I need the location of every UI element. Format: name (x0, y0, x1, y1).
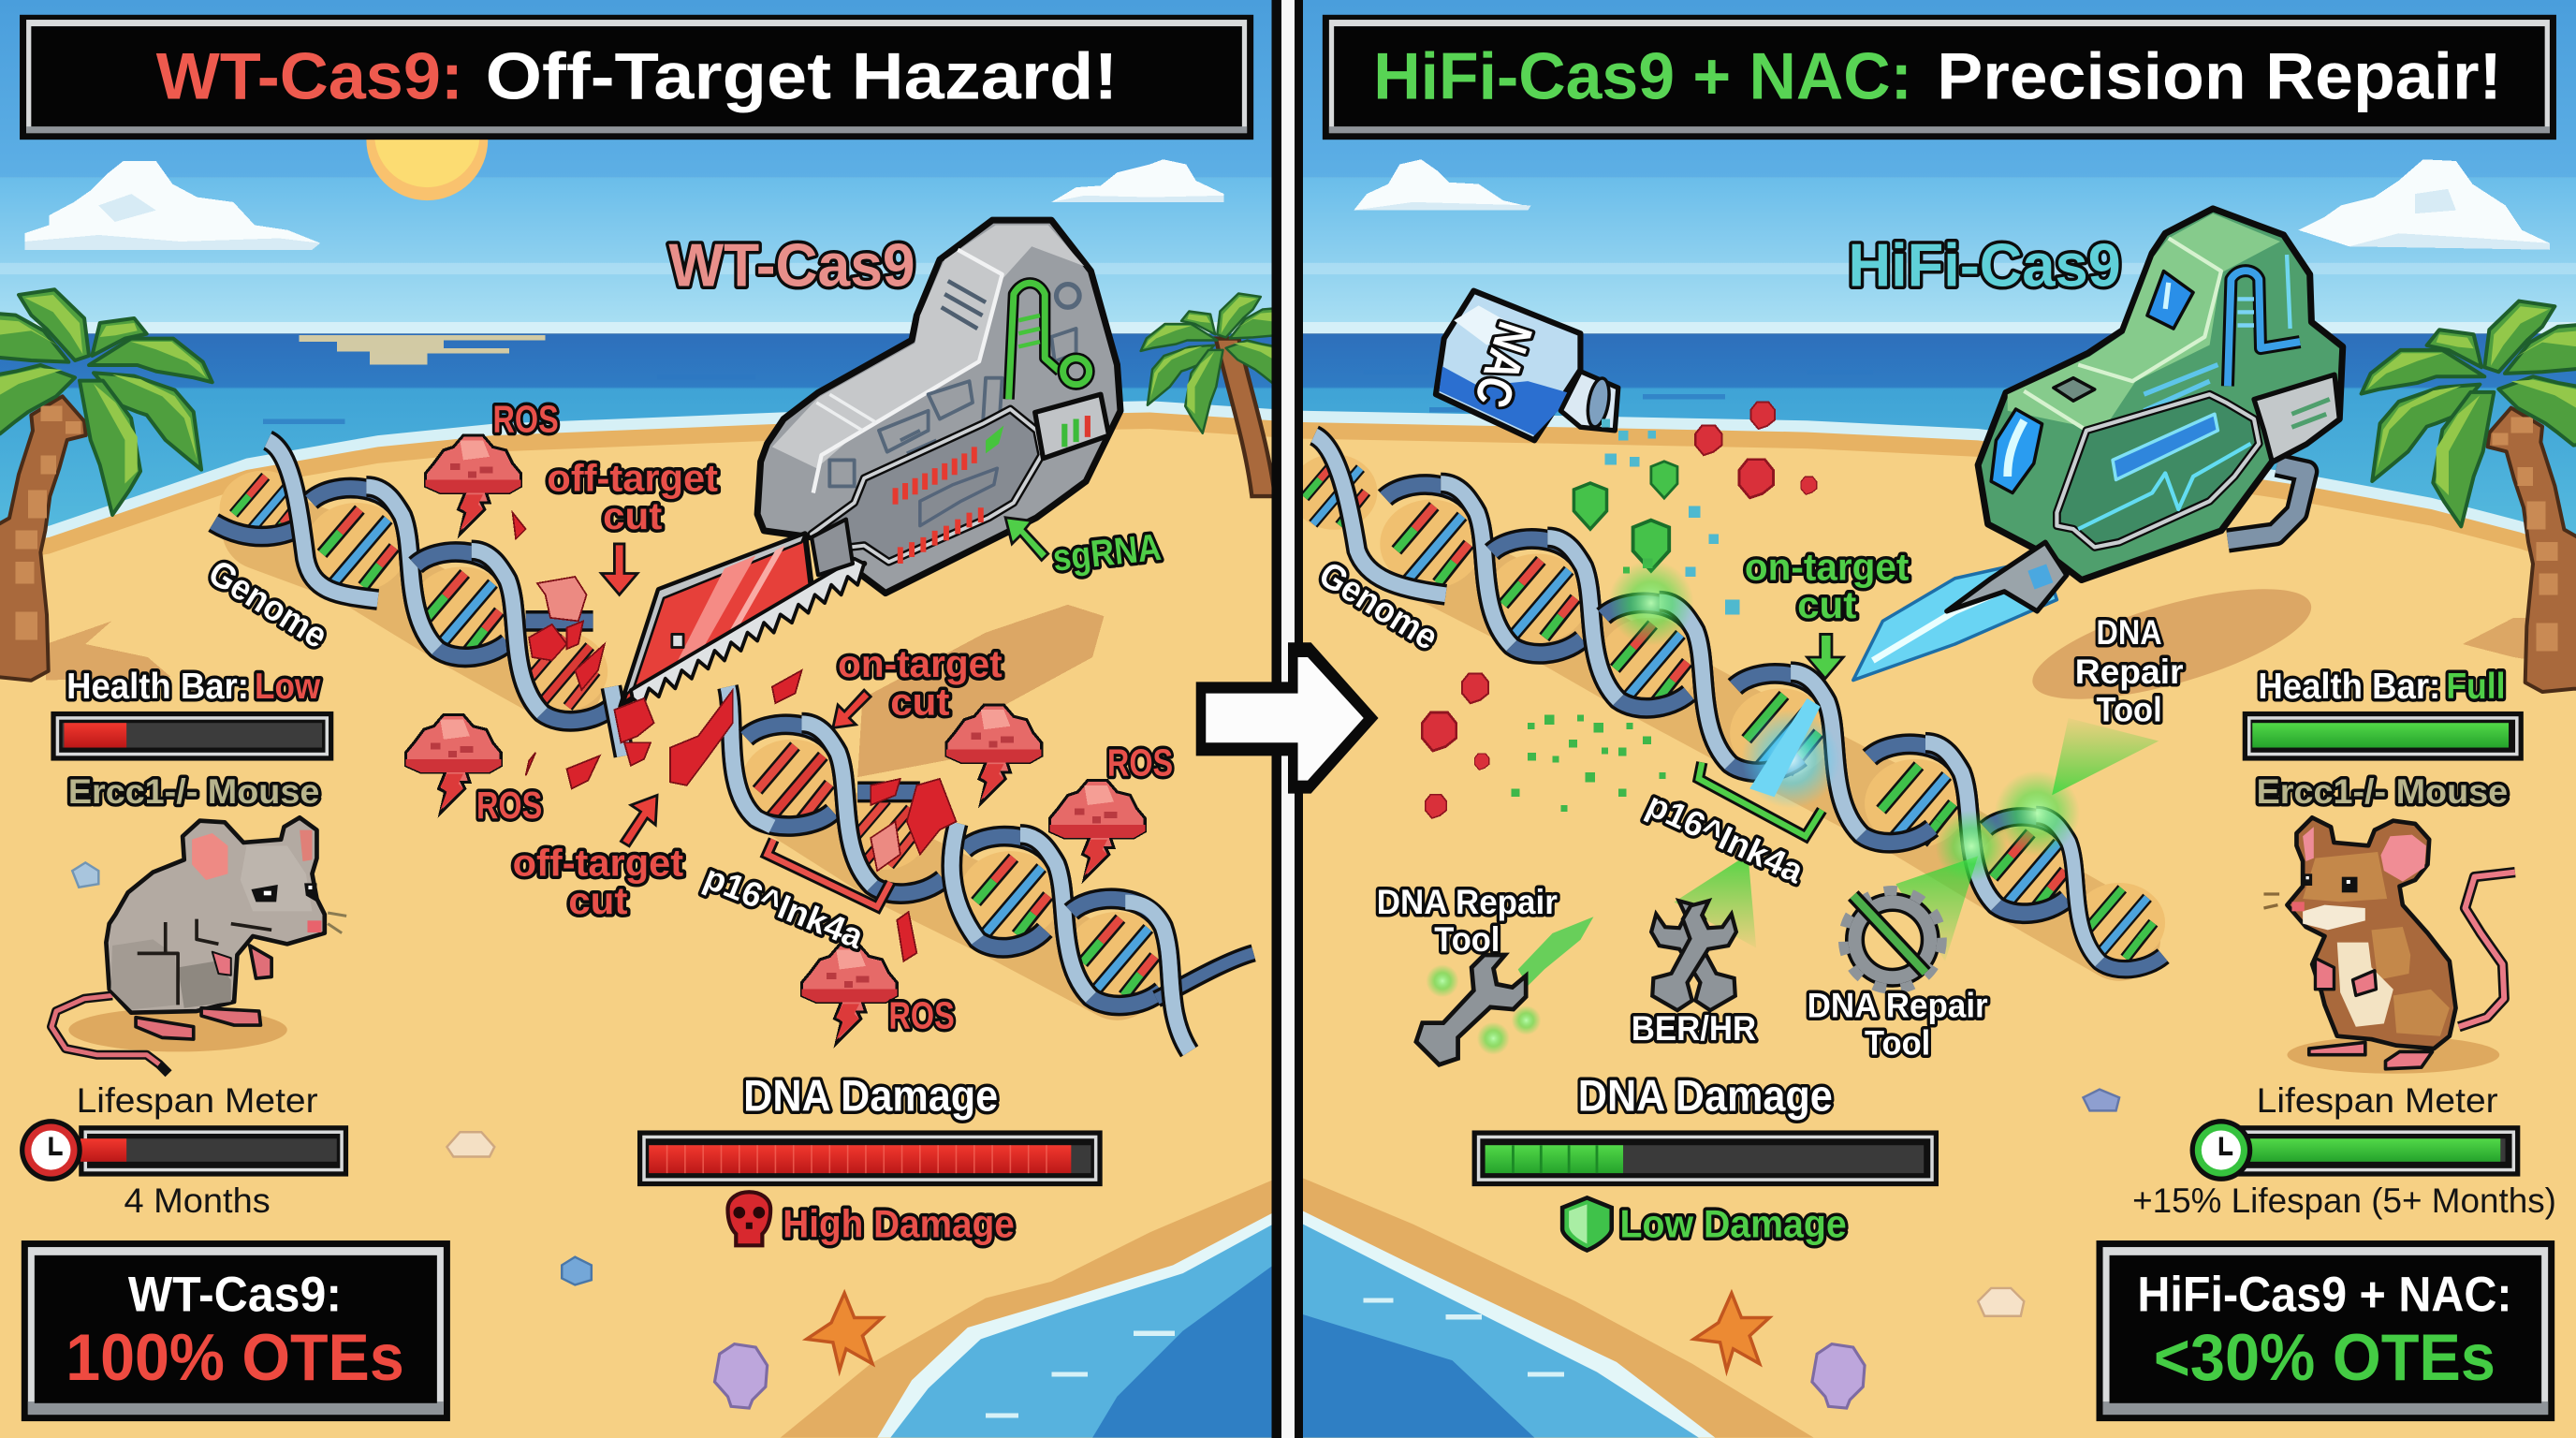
label: health bar full: Health Bar: (2258, 667, 2440, 707)
sand shadow patch (857, 605, 1104, 777)
etched circuits (829, 378, 1003, 486)
label: HiFi-Cas9 pixel heading: HiFi-Cas9 (1848, 230, 2121, 299)
label: lifespan value right: +15% Lifespan (5+ Months) (2132, 1181, 2556, 1220)
arrow: on-target right (1808, 634, 1843, 679)
ROS damage drops on right panel (1422, 403, 1817, 818)
sgRNA hairpin (1009, 283, 1090, 399)
mouse: healthy brown (2263, 817, 2515, 1074)
red debris fragments at off-target cuts (513, 513, 956, 961)
label: lifespan meter right: Lifespan Meter (2257, 1081, 2498, 1120)
icon: skull (728, 1192, 770, 1245)
gear etch (1057, 285, 1079, 307)
left mouse status column (20, 667, 348, 1220)
cloud right of sun (1051, 159, 1224, 202)
label: on-target cut (838, 642, 1003, 723)
label: on-target cut right: cut (1797, 583, 1856, 626)
label: health bar low: Health Bar: (66, 667, 249, 707)
stat text right: HiFi-Cas9 + NAC: (2137, 1268, 2512, 1323)
label: mouse strain: Ercc1-/- Mouse (68, 772, 319, 811)
beach decorations: shells, stones and starfish (72, 862, 2119, 1408)
label: off-target cut lower: cut (568, 879, 627, 922)
title text left (156, 38, 1118, 112)
bar: high damage (637, 1130, 1103, 1186)
beam blade (1853, 559, 2056, 681)
title text right: Precision Repair! (1937, 38, 2502, 112)
machine body (757, 220, 1120, 594)
health bar low (51, 712, 333, 761)
label: health bar full: Full (2446, 667, 2506, 707)
label: ROS bottom: ROS (889, 994, 955, 1037)
jaw (2056, 394, 2259, 547)
stat text: WT-Cas9: (128, 1268, 342, 1323)
NAC bottle: NAC (1464, 315, 1543, 414)
arrow: sgRNA (1005, 518, 1048, 560)
stat text (66, 1268, 404, 1394)
label: Genome right: Genome (1312, 554, 1445, 658)
lifespan meter high (2190, 1119, 2520, 1181)
label: DNA Repair Tool left: Tool (1434, 920, 1500, 959)
side box (1035, 394, 1109, 459)
sea ripples left (98, 374, 953, 462)
jaw (812, 409, 1042, 562)
sand shadow patch right (2022, 566, 2321, 722)
body (1978, 209, 2343, 580)
cloud left (24, 161, 320, 250)
label: ROS lower left: ROS (476, 784, 542, 827)
water corner left panel (781, 1180, 1273, 1438)
DNA helix: left genome, after the cut (728, 687, 1253, 1051)
label: p16 right: p16^Ink4a (1641, 785, 1809, 890)
label: DNA Repair Tool left (1377, 883, 1558, 959)
label: lifespan value: 4 Months (124, 1181, 271, 1220)
icon: gear and wrench (1843, 890, 1942, 990)
nozzle (1947, 542, 2067, 611)
title text right (1373, 38, 2502, 112)
label: DNA Repair Tool right (1808, 986, 1988, 1063)
palm tree: far right (2362, 301, 2576, 692)
label: DNA Repair Tool top (2075, 613, 2184, 728)
label: on-target cut right: on-target (1745, 546, 1909, 589)
lifespan meter low (20, 1119, 348, 1181)
sea ripples right (1364, 370, 1873, 413)
label: DNA Repair Tool right: DNA Repair (1808, 986, 1988, 1024)
stat panel: WT-Cas9 OTEs (22, 1240, 450, 1421)
stat text: 100% OTEs (66, 1320, 404, 1394)
DNA damage gauge: low (1472, 1071, 1939, 1251)
stat text right (2137, 1268, 2512, 1394)
helix shadows on the sand (263, 529, 2119, 979)
label: Low Damage: Low Damage (1620, 1202, 1847, 1246)
arrow: on-target (833, 690, 871, 727)
label: DNA Repair Tool top: Tool (2097, 690, 2162, 728)
HiFi-Cas9 green machine with laser blade (1853, 209, 2343, 681)
background: left beach scene (0, 0, 1273, 1438)
label: on-target cut right (1745, 546, 1909, 626)
icon: crossed wrenches (1642, 894, 1746, 1016)
vent (2054, 378, 2095, 401)
label: p16 left: p16^Ink4a (699, 858, 869, 956)
label: on-target cut: on-target (838, 642, 1003, 685)
bar: low damage (1472, 1130, 1939, 1186)
health bar full (2243, 712, 2524, 761)
label: off-target cut lower (513, 841, 683, 922)
label: DNA Damage right: DNA Damage (1578, 1071, 1833, 1121)
label: DNA Repair Tool left: DNA Repair (1377, 883, 1558, 921)
bracket: p16 left (768, 840, 890, 907)
label: off-target cut top (547, 457, 718, 537)
label: BER/HR: BER/HR (1632, 1009, 1756, 1048)
palm shadow left (46, 621, 171, 681)
blue window front (1991, 409, 2042, 493)
arrow: comparison (1196, 642, 1379, 794)
stat text right: <30% OTEs (2154, 1320, 2496, 1394)
label: off-target cut top: off-target (547, 457, 718, 500)
title text right: HiFi-Cas9 + NAC: (1373, 38, 1912, 112)
title text left: WT-Cas9: (156, 38, 463, 112)
label: lifespan meter: Lifespan Meter (77, 1081, 318, 1120)
label: DNA Repair Tool top: Repair (2075, 653, 2184, 691)
label: mouse strain right: Ercc1-/- Mouse (2257, 772, 2508, 811)
label: DNA Repair Tool right: Tool (1865, 1024, 1930, 1063)
palm tree: far left (0, 289, 212, 681)
hose (2228, 465, 2306, 540)
palm shadow right (2463, 618, 2576, 668)
blue window top (2147, 271, 2193, 329)
NAC antioxidants: shields and particles (1512, 419, 1740, 820)
arrow: off-target up (621, 795, 657, 846)
WT-Cas9 grey machine with saw blade (621, 220, 1120, 707)
DNA helix: right genome (1291, 435, 2165, 969)
cloud right panel right (2298, 159, 2550, 250)
top light plane (772, 225, 1084, 468)
label: ROS right: ROS (1107, 741, 1173, 784)
sun (366, 79, 488, 200)
right mouse status column (2132, 667, 2556, 1220)
label: DNA Damage: DNA Damage (743, 1071, 998, 1121)
label: on-target cut: cut (890, 680, 949, 723)
on-target cut glow on right helix (1741, 698, 1840, 808)
rivet (672, 634, 683, 647)
label: High Damage: High Damage (783, 1202, 1015, 1246)
ROS clouds (406, 435, 1145, 1043)
label: Genome: Genome (201, 552, 334, 656)
divider between panels (1271, 0, 1303, 1438)
DNA damage gauge: high (637, 1071, 1103, 1246)
mouse: sick grey (51, 817, 346, 1074)
label: sgRNA: sgRNA (1051, 525, 1164, 580)
title panel: right (1323, 15, 2556, 139)
title panel: left (20, 15, 1253, 139)
blue hairpin conduit (2228, 271, 2300, 386)
label: ROS: ROS (493, 398, 559, 441)
label: off-target cut lower: off-target (513, 841, 683, 884)
cloud right panel left (1354, 159, 1531, 211)
bracket: p16 right (1699, 762, 1822, 836)
label: WT-Cas9 pixel heading: WT-Cas9 (668, 230, 915, 299)
repair beams (1674, 718, 2159, 961)
arrow: off-target down (601, 544, 637, 594)
water corner right panel (1303, 1178, 1814, 1438)
red ticks (896, 447, 981, 564)
light top plane (2008, 213, 2280, 431)
label: DNA Repair Tool top: DNA (2097, 613, 2162, 652)
side box (2254, 374, 2339, 462)
palm tree: left panel right edge (1141, 293, 1288, 496)
background: right beach scene (1303, 0, 2576, 1438)
label: health bar low: Low (255, 667, 321, 707)
NAC bottle (1436, 291, 1618, 440)
sun reflection on sea (299, 335, 546, 365)
saw blade (621, 534, 864, 707)
title text left: Off-Target Hazard! (486, 38, 1118, 112)
icon: shield (1562, 1197, 1612, 1251)
label: off-target cut top: cut (603, 494, 662, 537)
stat panel: HiFi OTEs (2097, 1240, 2554, 1421)
icon: spray wrench (1407, 917, 1593, 1074)
DNA helix: left genome, before the cut (213, 440, 624, 756)
